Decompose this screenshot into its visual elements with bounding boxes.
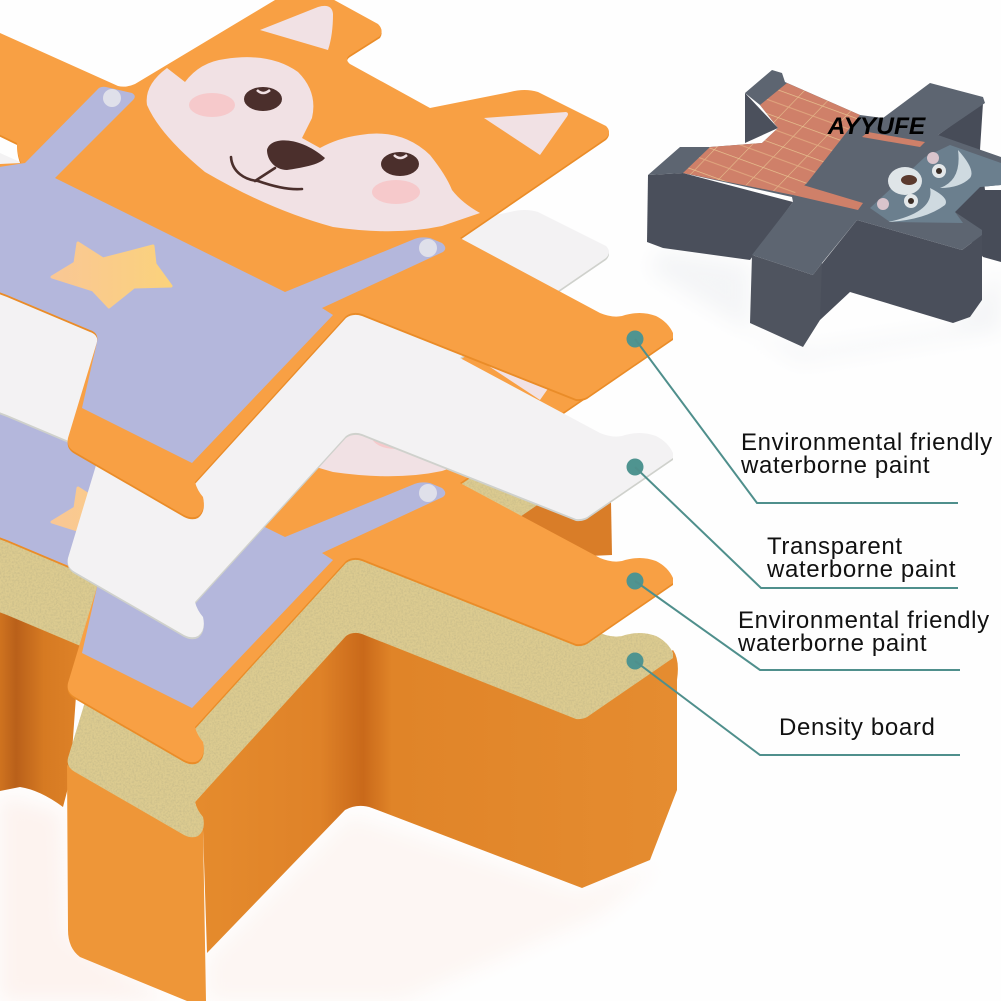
hatched shirt <box>683 83 860 195</box>
eyes <box>244 87 282 111</box>
mouth <box>231 157 302 189</box>
bear face <box>870 145 1001 223</box>
callout: lower paint layer: Environmental friendly <box>738 607 990 634</box>
callout: density board <box>626 652 960 755</box>
layer: transparent paint sheet <box>0 110 673 639</box>
strap buttons <box>103 89 121 107</box>
callout: transparent paint <box>626 458 958 588</box>
wood back arm <box>500 448 612 556</box>
straps <box>793 132 925 210</box>
fox face <box>147 57 480 231</box>
callout: lower paint layer <box>626 572 990 670</box>
shadows <box>0 250 1001 1001</box>
callout: transparent paint: Transparent <box>767 533 903 560</box>
bear side faces <box>745 93 778 143</box>
layer: density board block <box>0 310 678 1001</box>
density top <box>0 310 673 837</box>
brand name: AYYUFE <box>827 113 926 140</box>
callout: transparent paint: waterborne paint <box>766 556 956 583</box>
wood front face <box>67 765 206 1001</box>
illustration: exploded fox block layers <box>0 0 678 1001</box>
ears <box>260 6 333 50</box>
layer: top orange paint with fox <box>0 0 673 519</box>
callout: top paint layer: Environmental friendly <box>741 429 993 456</box>
callout: top paint layer: waterborne paint <box>740 452 930 479</box>
callout: top paint layer <box>626 330 993 503</box>
bear top face <box>648 70 1001 275</box>
nose and eyes <box>888 167 922 195</box>
callout: lower paint layer: waterborne paint <box>737 630 927 657</box>
icon: grey bear block <box>647 70 1001 347</box>
orange silhouette <box>0 0 673 517</box>
nose <box>267 140 325 170</box>
overalls <box>0 87 445 463</box>
star <box>52 243 171 307</box>
wood left side <box>0 600 80 807</box>
wood right side <box>195 628 678 953</box>
cheeks <box>189 93 235 117</box>
callout: density board: Density board <box>779 714 936 741</box>
layer: lower orange paint with overalls <box>0 235 673 764</box>
